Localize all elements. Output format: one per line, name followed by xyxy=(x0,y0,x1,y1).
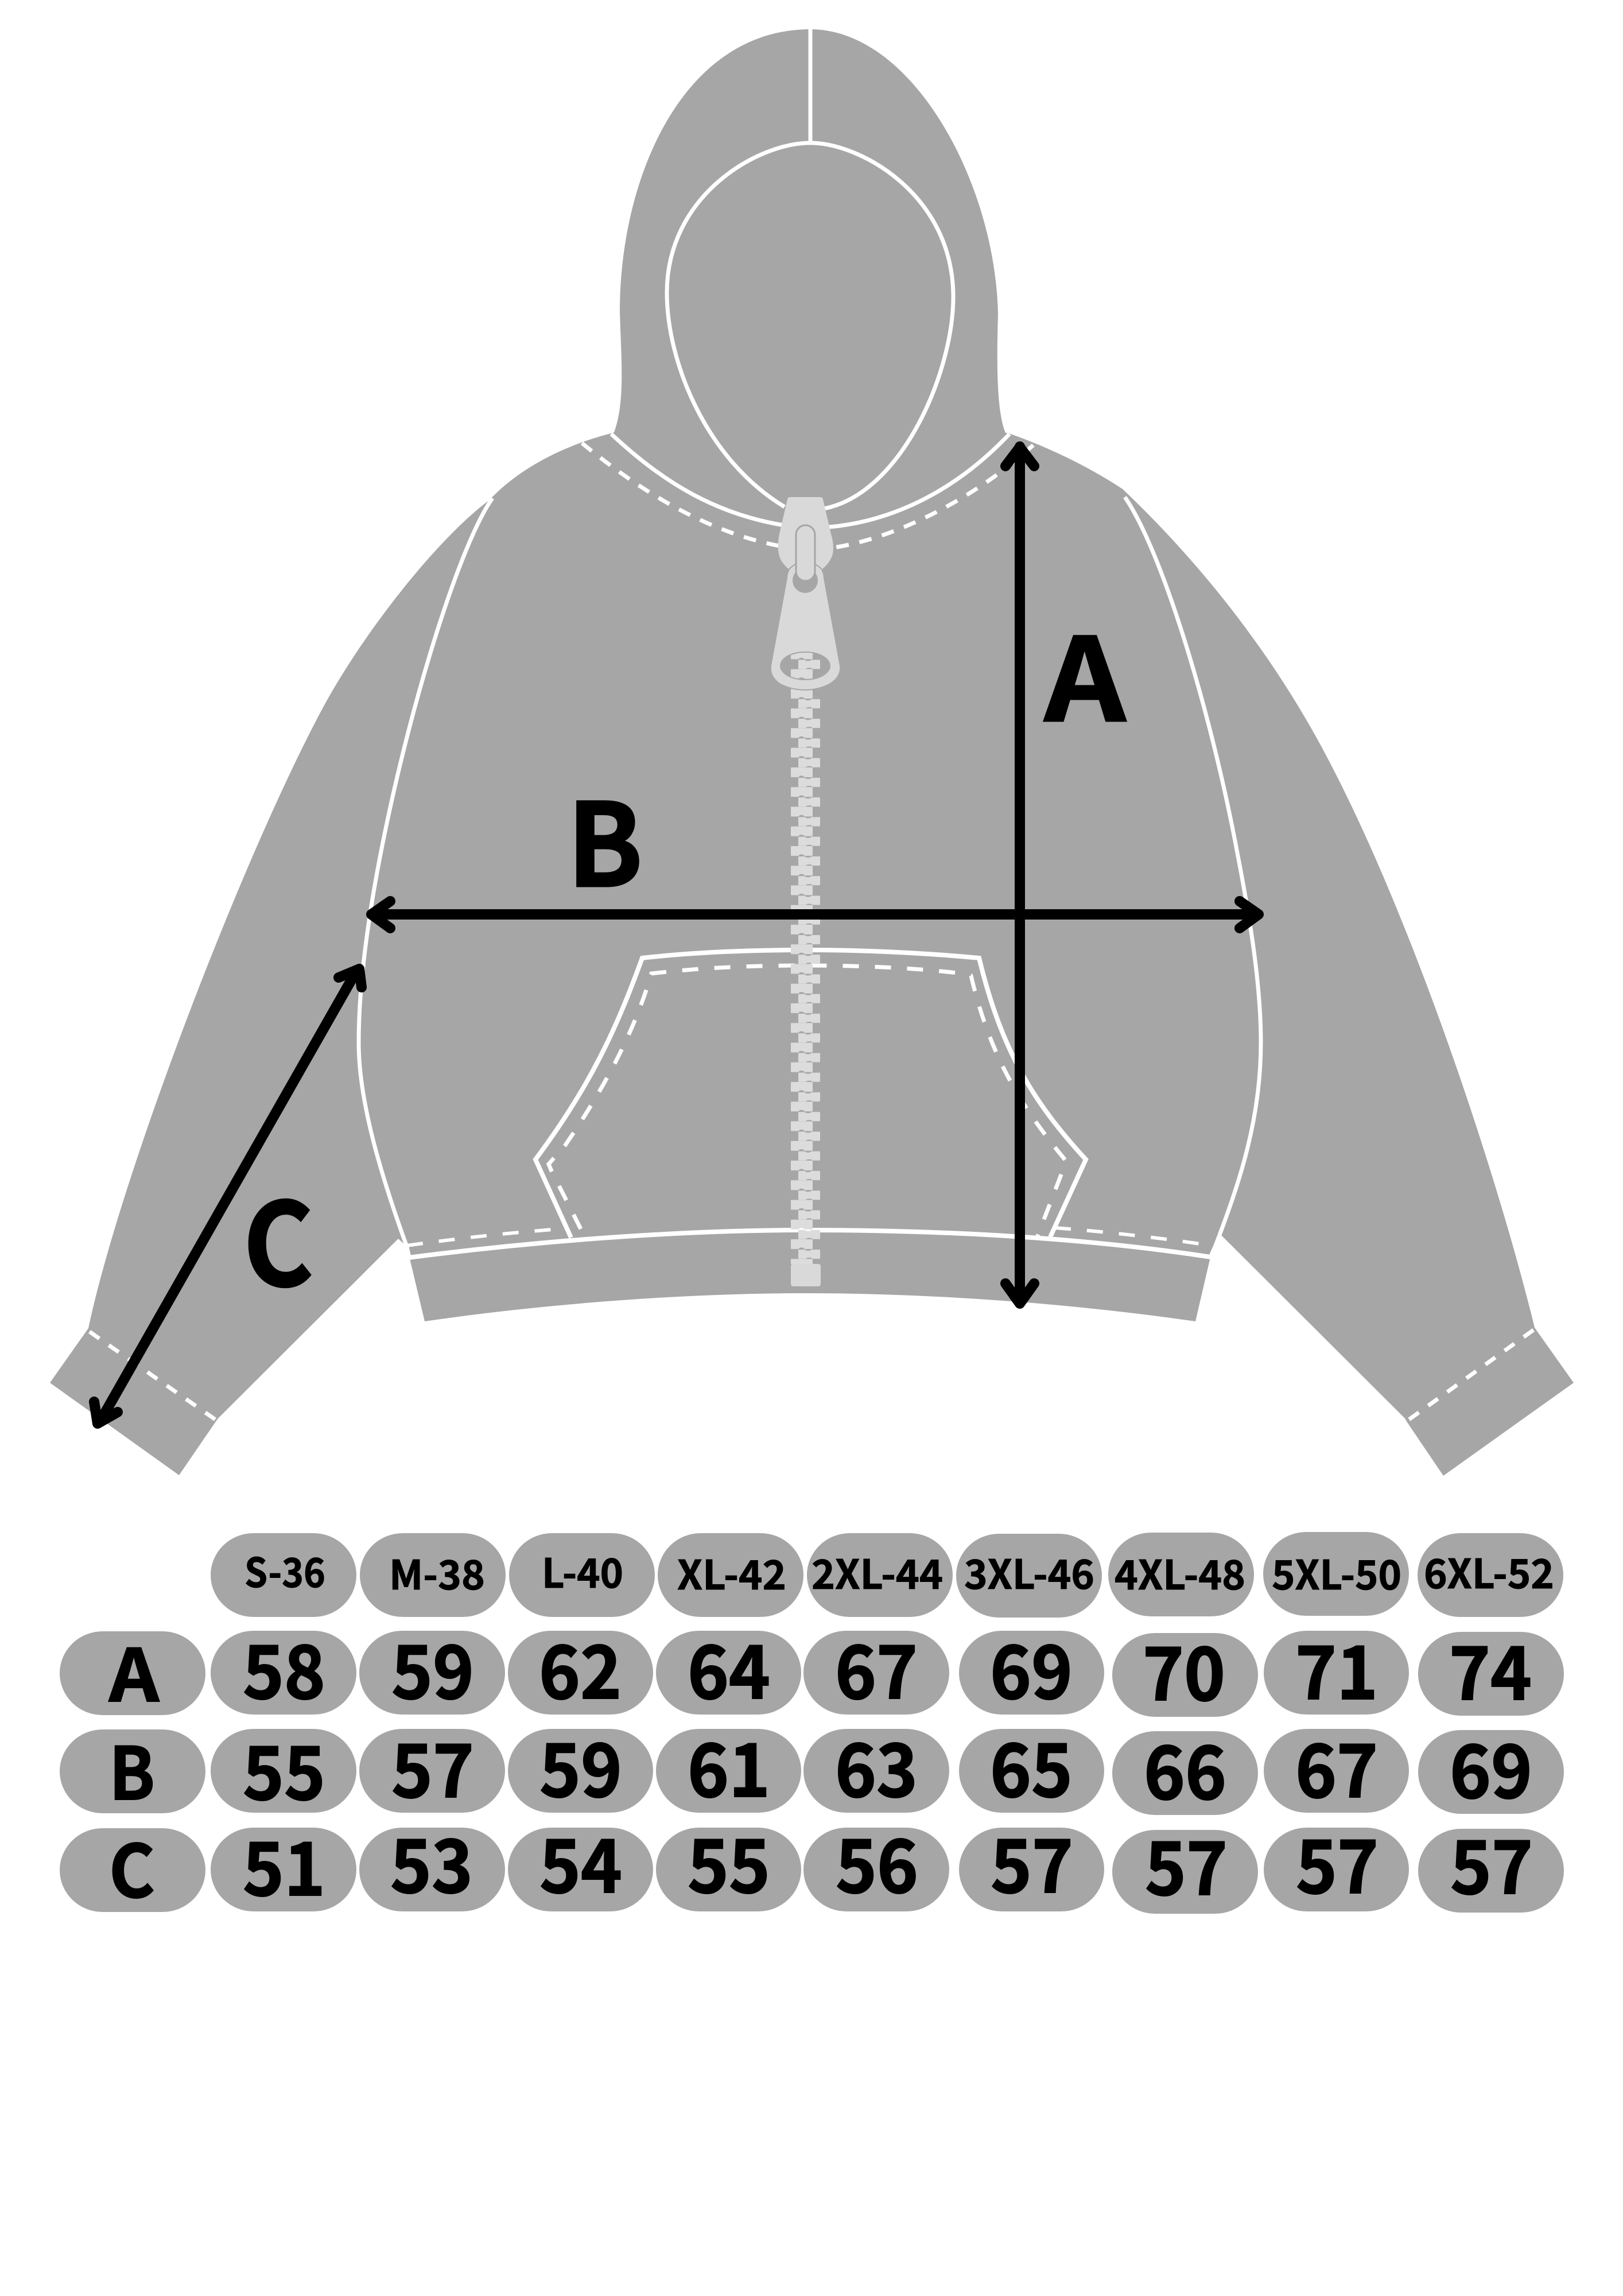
header M-38 xyxy=(360,1533,506,1617)
zipper pull hole xyxy=(793,568,818,593)
hood centre seam xyxy=(808,29,813,143)
right cuff stitching xyxy=(1407,1330,1533,1421)
C 4XL-48 xyxy=(1112,1810,1258,1916)
header L-40 xyxy=(509,1533,655,1617)
header 6XL-52 xyxy=(1418,1533,1563,1617)
B XL-42: 61 xyxy=(688,1712,770,1818)
row label B: B xyxy=(109,1716,155,1821)
zipper bottom stop xyxy=(791,1264,821,1286)
C 2XL-44 xyxy=(803,1808,949,1914)
hood face opening xyxy=(667,143,953,509)
zipper teeth xyxy=(791,650,821,1264)
header S-36 xyxy=(211,1533,356,1617)
hem stitching left xyxy=(407,1228,568,1246)
header 6XL-52: 6XL-52 xyxy=(1424,1542,1554,1600)
header 5XL-50: 5XL-50 xyxy=(1272,1543,1401,1601)
B 5XL-50: 67 xyxy=(1295,1712,1378,1818)
header L-40: L-40 xyxy=(542,1542,623,1600)
B S-36: 55 xyxy=(243,1715,325,1821)
header 3XL-46: 3XL-46 xyxy=(964,1543,1094,1601)
B 4XL-48 xyxy=(1112,1714,1258,1820)
C M-38 xyxy=(359,1808,505,1914)
row label B xyxy=(60,1716,205,1821)
A 4XL-48 xyxy=(1112,1615,1258,1721)
B L-40 xyxy=(508,1712,653,1818)
size table xyxy=(60,1532,1564,1918)
C 5XL-50: 57 xyxy=(1296,1808,1379,1914)
collar seam xyxy=(611,434,1009,528)
header M-38: M-38 xyxy=(389,1543,485,1601)
header XL-42 xyxy=(658,1533,803,1617)
B 6XL-52 xyxy=(1418,1713,1564,1819)
header 2XL-44 xyxy=(807,1533,953,1617)
header 3XL-46 xyxy=(956,1534,1102,1618)
C 3XL-46 xyxy=(959,1808,1104,1914)
row label C xyxy=(60,1814,205,1918)
A 5XL-50 xyxy=(1264,1614,1409,1720)
A 6XL-52 xyxy=(1418,1615,1564,1721)
B XL-42 xyxy=(656,1712,801,1818)
header S-36: S-36 xyxy=(244,1541,325,1599)
B M-38 xyxy=(359,1712,505,1818)
label C: C xyxy=(243,1153,313,1319)
header 2XL-44: 2XL-44 xyxy=(812,1543,943,1601)
C 2XL-44: 56 xyxy=(836,1808,918,1914)
B 2XL-44 xyxy=(803,1712,949,1818)
zipper ring xyxy=(796,525,815,581)
A L-40: 62 xyxy=(539,1614,622,1720)
C 4XL-48: 57 xyxy=(1145,1810,1228,1916)
zipper slider xyxy=(778,497,833,569)
A S-36: 58 xyxy=(243,1614,325,1720)
row label A: A xyxy=(108,1618,160,1723)
C XL-42: 55 xyxy=(688,1808,770,1914)
arrow C: sleeve length xyxy=(94,969,362,1424)
A S-36 xyxy=(211,1614,356,1720)
hem stitching right xyxy=(1055,1228,1216,1246)
B 2XL-44: 63 xyxy=(835,1712,918,1818)
B 3XL-46: 65 xyxy=(990,1712,1073,1818)
B 3XL-46 xyxy=(959,1712,1104,1818)
C XL-42 xyxy=(656,1808,801,1914)
left sleeve seam xyxy=(359,498,492,1260)
A 5XL-50: 71 xyxy=(1295,1614,1378,1720)
left cuff stitching xyxy=(90,1332,217,1421)
B S-36 xyxy=(211,1715,356,1821)
A XL-42 xyxy=(656,1614,801,1720)
hoodie silhouette xyxy=(50,29,1574,1476)
label A: A xyxy=(1044,588,1126,754)
row label A xyxy=(60,1618,205,1723)
A 4XL-48: 70 xyxy=(1143,1615,1225,1721)
A 3XL-46: 69 xyxy=(990,1614,1073,1720)
C 5XL-50 xyxy=(1264,1808,1409,1914)
C L-40: 54 xyxy=(539,1808,622,1914)
B 6XL-52: 69 xyxy=(1450,1713,1532,1819)
arrow B: chest width xyxy=(371,901,1259,928)
C 6XL-52: 57 xyxy=(1450,1809,1533,1915)
A M-38 xyxy=(359,1614,505,1720)
hem rib seam xyxy=(409,1230,1211,1258)
hoodie illustration xyxy=(50,29,1574,1476)
A M-38: 59 xyxy=(391,1614,474,1720)
collar stitching xyxy=(582,443,1035,550)
A L-40 xyxy=(508,1614,653,1720)
C L-40 xyxy=(508,1808,653,1914)
A 3XL-46 xyxy=(959,1614,1104,1720)
B M-38: 57 xyxy=(391,1712,474,1818)
header 4XL-48 xyxy=(1108,1533,1254,1616)
header XL-42: XL-42 xyxy=(677,1543,786,1601)
row label C: C xyxy=(109,1814,155,1918)
header 4XL-48: 4XL-48 xyxy=(1115,1543,1245,1601)
header 5XL-50 xyxy=(1263,1532,1409,1616)
zipper pull tab xyxy=(771,561,840,690)
A 6XL-52: 74 xyxy=(1449,1615,1532,1721)
C S-36 xyxy=(211,1810,356,1917)
right sleeve seam xyxy=(1125,497,1261,1256)
C M-38: 53 xyxy=(390,1808,473,1914)
A XL-42: 64 xyxy=(688,1614,770,1720)
pocket outline xyxy=(535,950,1086,1238)
pocket stitching xyxy=(549,965,1066,1236)
C 3XL-46: 57 xyxy=(991,1808,1073,1914)
C 6XL-52 xyxy=(1418,1809,1564,1915)
label B: B xyxy=(567,753,643,920)
zipper xyxy=(771,497,840,1286)
B 5XL-50 xyxy=(1264,1712,1409,1818)
A 2XL-44 xyxy=(803,1614,949,1720)
A 2XL-44: 67 xyxy=(835,1614,918,1720)
B L-40: 59 xyxy=(539,1712,622,1818)
C S-36: 51 xyxy=(243,1810,325,1917)
B 4XL-48: 66 xyxy=(1144,1714,1226,1820)
arrow A: length xyxy=(1005,447,1034,1304)
